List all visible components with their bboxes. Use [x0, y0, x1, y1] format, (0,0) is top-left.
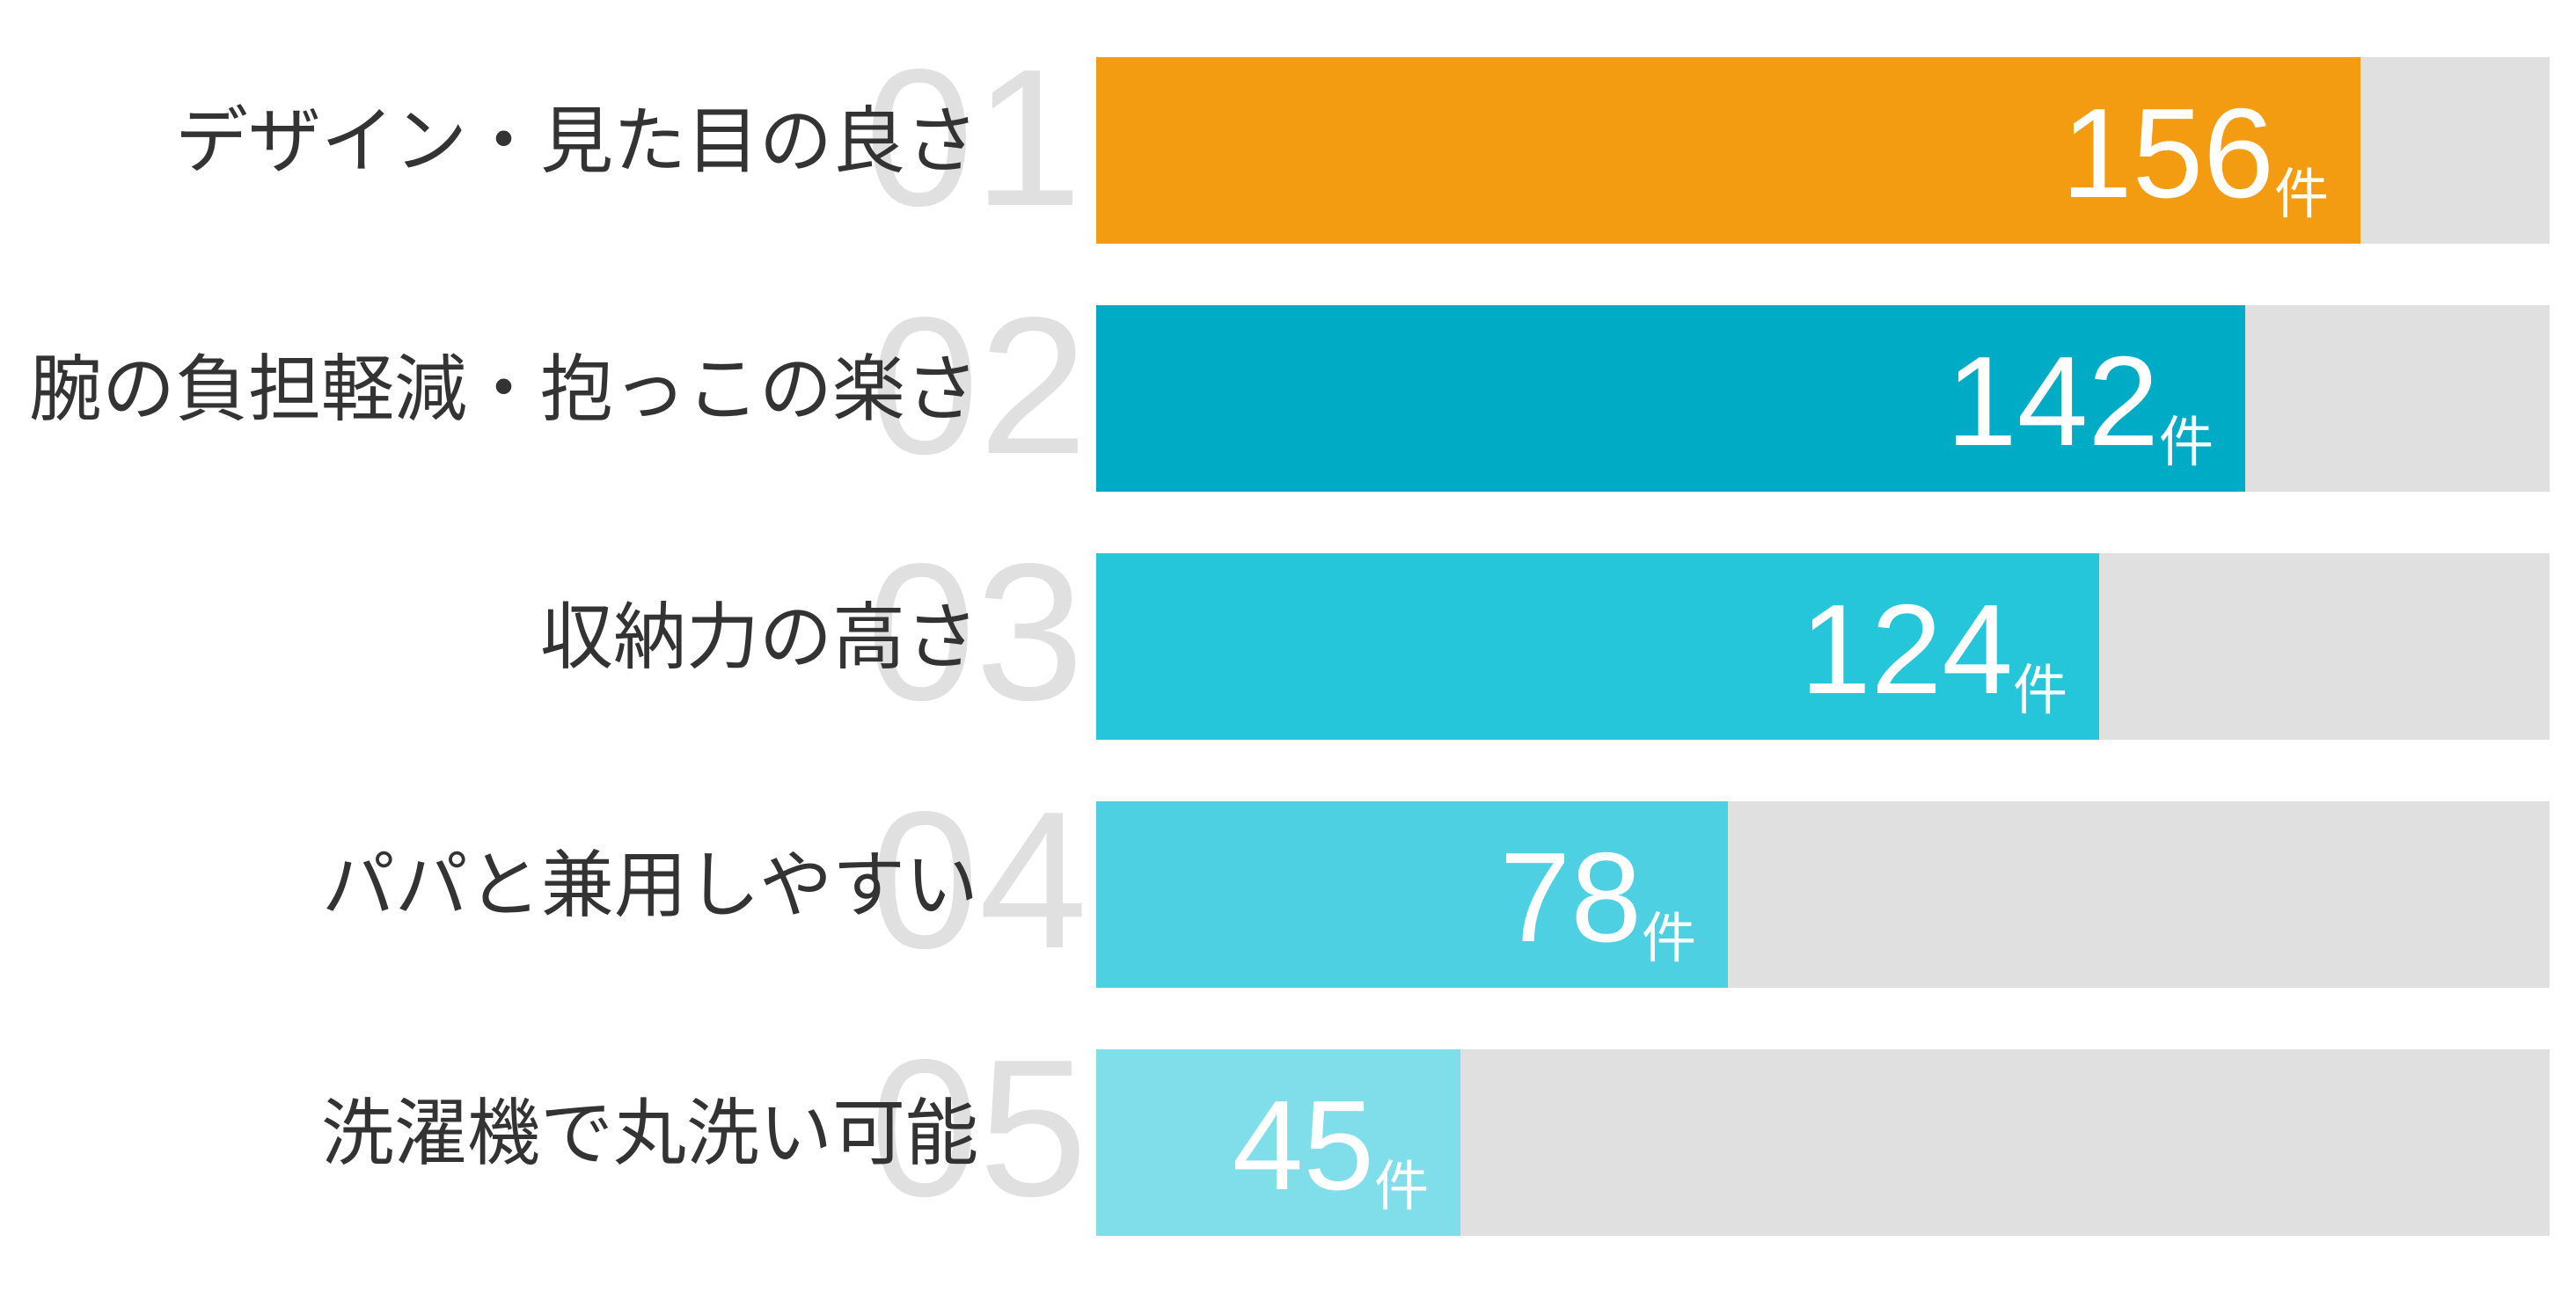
row 4: [322, 771, 2550, 990]
row 3: 124: [1800, 578, 2013, 720]
row 1: 01: [865, 29, 1082, 247]
row 5: 45: [1233, 1074, 1374, 1216]
row 2: [29, 277, 2550, 495]
row 1: 件: [2274, 164, 2329, 225]
row 4: 件: [1642, 909, 1696, 969]
row 4: 04: [870, 771, 1087, 990]
row 3: [540, 523, 2550, 741]
row 3: 件: [2013, 661, 2067, 721]
row 2: 腕の負担軽減・抱っこの楽さ: [29, 348, 978, 430]
row 4: 78: [1500, 826, 1642, 968]
row 2: 142: [1946, 330, 2159, 472]
row 5: [321, 1019, 2550, 1238]
row 2: 02: [870, 277, 1087, 495]
row 5: 件: [1374, 1157, 1429, 1217]
row 1: デザイン・見た目の良さ: [175, 100, 978, 182]
row 5: 05: [870, 1019, 1087, 1238]
row 1: [175, 29, 2550, 247]
row 3: 03: [867, 523, 1084, 741]
row 3: 収納力の高さ: [540, 596, 978, 678]
row 4: パパと兼用しやすい: [322, 844, 978, 926]
row 5: 洗濯機で丸洗い可能: [321, 1092, 978, 1174]
row 2: 件: [2159, 413, 2214, 473]
row 1: 156: [2061, 82, 2274, 224]
